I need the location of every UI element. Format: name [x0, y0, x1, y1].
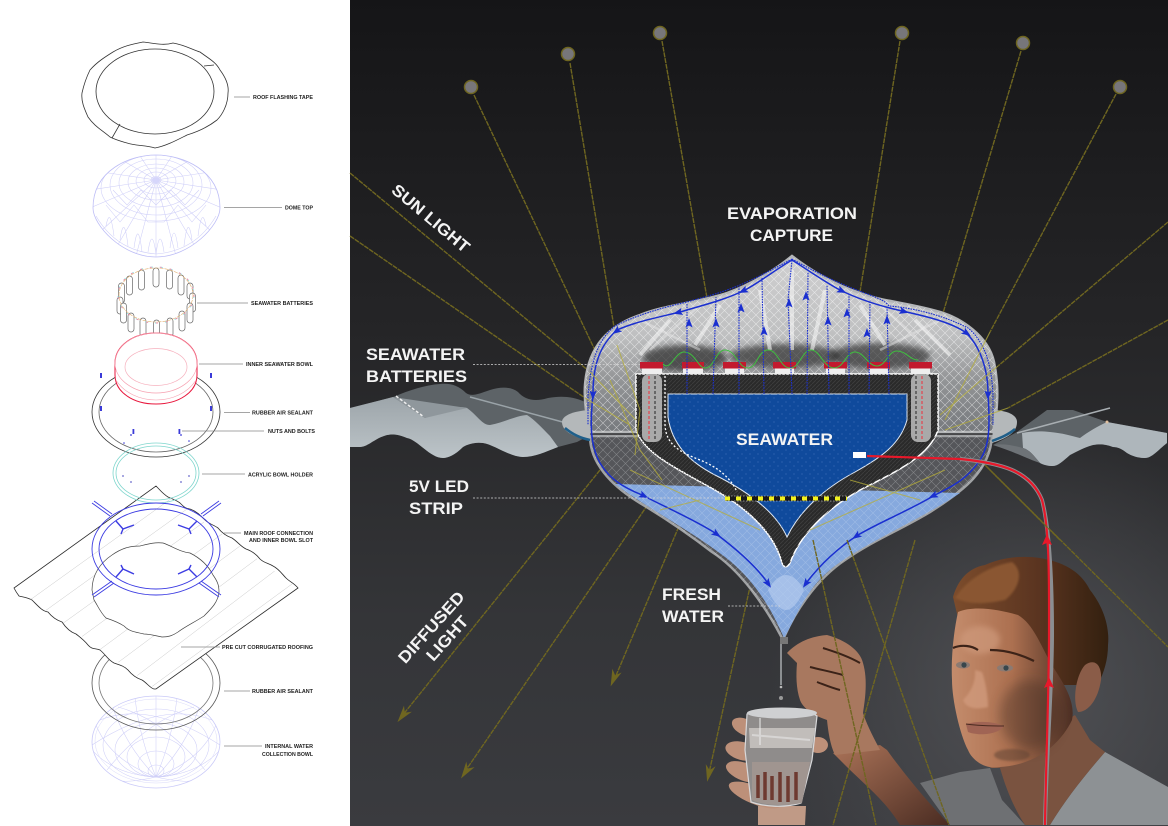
- labels: parts list: INTERNAL WATER: [265, 744, 313, 750]
- ear: [1075, 662, 1101, 712]
- heading: evaporation capture: EVAPORATION: [727, 205, 857, 223]
- label: fresh water: [662, 586, 724, 626]
- part: nuts and bolts: [100, 373, 212, 444]
- inner seawater vessel: [636, 350, 938, 567]
- water flow arrows: [588, 259, 993, 590]
- sun light rays: [350, 41, 1168, 408]
- hair: [953, 557, 1108, 685]
- labels: parts list: RUBBER AIR SEALANT: [252, 689, 314, 695]
- part: dome top: [90, 155, 222, 257]
- rays crossing the device: [585, 332, 1008, 530]
- labels: parts list: RUBBER AIR SEALANT: [252, 410, 314, 416]
- drinking glass: [745, 708, 817, 806]
- diffused light arrows: [394, 465, 1168, 783]
- person: [723, 456, 1168, 825]
- label: fresh water: FRESH: [662, 586, 721, 604]
- label: seawater batteries: [366, 346, 467, 386]
- part: roof flashing tape: [82, 42, 228, 148]
- water drip: [779, 637, 788, 700]
- labels: parts list: SEAWATER BATTERIES: [251, 301, 313, 307]
- neck: [990, 715, 1105, 825]
- heading: diffused light: DIFFUSED: [395, 588, 469, 667]
- shirt right: [1050, 752, 1168, 825]
- battery caps: [640, 362, 932, 374]
- label: fresh water: WATER: [662, 608, 724, 626]
- sun dots: [464, 26, 1126, 94]
- dome: [580, 250, 1000, 435]
- pinching hand: [787, 635, 880, 755]
- sensor: [853, 452, 866, 458]
- leader lines: [473, 364, 780, 606]
- fresh water: [615, 484, 960, 638]
- label: 5v led strip: 5V LED: [409, 478, 469, 496]
- labels: parts list: COLLECTION BOWL: [262, 752, 314, 758]
- corrugated roof right: [993, 408, 1167, 466]
- heading: sun light: SUN LIGHT: [388, 181, 473, 257]
- part: seawater batteries: [117, 267, 196, 339]
- face: [952, 609, 1073, 768]
- labels: parts list: ACRYLIC BOWL HOLDER: [248, 472, 313, 478]
- lower collection bowl: [590, 436, 992, 640]
- forearm: [833, 745, 950, 825]
- part: pre cut corrugated roofing: [14, 486, 298, 689]
- arrows on tube: [1042, 534, 1054, 688]
- labels: parts list: AND INNER BOWL SLOT: [249, 538, 314, 544]
- heading: evaporation capture: [727, 205, 857, 245]
- labels: parts list: [181, 95, 315, 758]
- part: inner seawater bowl: [115, 333, 197, 404]
- corrugated roof left: [350, 384, 596, 458]
- label: seawater batteries: SEAWATER: [366, 346, 465, 364]
- heading: diffused light: LIGHT: [423, 613, 472, 665]
- label: 5v led strip: STRIP: [409, 500, 463, 518]
- panel: dark photo background: [350, 0, 1168, 826]
- part: rubber air sealant upper: [92, 367, 220, 457]
- led strip: [725, 496, 847, 501]
- part: internal water collection bowl: [92, 696, 220, 788]
- red water tube: [867, 456, 1052, 825]
- panel: exploded parts diagram: [14, 42, 315, 788]
- shirt left: [920, 768, 1025, 825]
- part: acrylic bowl holder: [113, 443, 199, 503]
- labels: parts list: ROOF FLASHING TAPE: [253, 95, 313, 101]
- labels: parts list: NUTS AND BOLTS: [268, 429, 315, 435]
- label: seawater batteries: BATTERIES: [366, 368, 467, 386]
- label: seawater: SEAWATER: [736, 431, 833, 449]
- labels: parts list: PRE CUT CORRUGATED ROOFING: [222, 645, 313, 651]
- glass hand: [723, 714, 828, 825]
- label: 5v led strip: [409, 478, 469, 518]
- labels: parts list: INNER SEAWATER BOWL: [246, 362, 314, 368]
- face features: [953, 646, 1034, 761]
- seawater: [668, 394, 907, 537]
- heading: evaporation capture: CAPTURE: [750, 227, 833, 245]
- labels: parts list: MAIN ROOF CONNECTION: [244, 531, 313, 537]
- wiring: [663, 350, 918, 368]
- flanges: [562, 410, 1017, 443]
- rays passing over the person: [813, 465, 1060, 825]
- part: rubber air sealant lower: [92, 636, 220, 730]
- labels: parts list: DOME TOP: [285, 206, 313, 212]
- battery tubes: [642, 374, 931, 442]
- part: main roof connection ring: [92, 501, 221, 597]
- device: lamp: [562, 250, 1168, 825]
